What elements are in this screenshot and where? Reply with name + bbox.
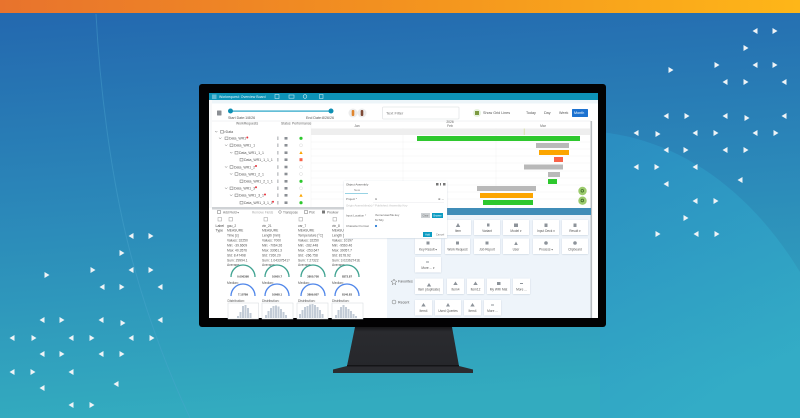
text filter: Text Filter	[386, 110, 404, 115]
column statistics: Length [V]	[332, 234, 347, 238]
average gauges: Average:	[332, 263, 345, 267]
average gauges: Average:	[227, 263, 240, 267]
card icons	[421, 223, 577, 306]
card labels: Clipboard	[568, 248, 582, 252]
average gauges: 0.000398	[237, 274, 249, 278]
section labels: Recent	[398, 301, 409, 305]
tree labels: Data_WR1	[229, 137, 246, 141]
column statistics: var_7	[298, 224, 306, 228]
column statistics: MEASURE	[298, 229, 315, 233]
column statistics	[227, 224, 361, 262]
column statistics: Min: -282.448	[298, 243, 318, 247]
profile toolbar: Preview	[327, 210, 339, 214]
dialog actions: Add	[425, 232, 430, 236]
column headers: Status	[281, 121, 291, 125]
average gauges: 8372.87	[342, 274, 352, 278]
column statistics: Min: -7064.26	[262, 243, 282, 247]
column statistics: Max: -253.647	[298, 248, 319, 252]
row labels: Type	[216, 229, 223, 233]
distribution histograms: Distribution:	[228, 299, 245, 303]
background light curve	[96, 14, 190, 418]
column statistics: MEASURE	[227, 229, 244, 233]
dialog actions	[423, 232, 445, 237]
tree scrollbar	[212, 207, 344, 210]
distribution histograms: Distribution:	[298, 299, 315, 303]
dialog form fields: M-Tidy	[375, 218, 384, 222]
dialog form fields: Published: Assembly Key	[375, 204, 408, 208]
row menu and status icons	[278, 136, 288, 204]
vertical scrollbar	[590, 121, 592, 318]
card labels: More ...	[487, 309, 498, 313]
card labels: User	[513, 248, 520, 252]
card labels: Item12	[471, 288, 481, 292]
card labels: More ... ▾	[421, 266, 435, 270]
dialog file buttons: Browse	[433, 214, 442, 217]
column statistics: Values: 32250	[227, 238, 248, 242]
average gauges: 10600.7	[272, 274, 282, 278]
column headers	[236, 121, 312, 125]
timeline headers: Mar	[540, 124, 547, 128]
work request tree	[209, 100, 344, 210]
tree labels: Data_WR1_1_1_1	[244, 158, 273, 162]
column statistics: Length [mm]	[262, 234, 280, 238]
card labels	[418, 229, 582, 313]
column statistics: Max: 39057.7	[332, 248, 352, 252]
average gauges	[227, 263, 359, 278]
timeline headers: 2026	[446, 120, 454, 124]
card labels: Input Deck ▾	[537, 229, 555, 233]
performance indicators	[299, 137, 303, 204]
monitor screen	[209, 93, 598, 319]
card labels: Key Result ▾	[419, 248, 437, 252]
red flags	[246, 136, 274, 203]
avatars	[348, 108, 366, 118]
column statistics: Values: 10197	[332, 238, 353, 242]
column statistics: Max: 33061.3	[262, 248, 282, 252]
median gauges	[227, 281, 359, 296]
card labels: Item4	[420, 309, 428, 313]
tree labels: Data_WR1_3_1_1	[244, 201, 273, 205]
row labels	[216, 224, 224, 233]
distribution histograms	[228, 299, 363, 319]
dialog form fields: iti	[375, 197, 377, 201]
average gauges: Average:	[262, 263, 275, 267]
tree icons	[215, 130, 243, 204]
tree labels: Data_WR1_2_1_1	[244, 180, 273, 184]
profile toolbar: Transpose	[283, 210, 298, 214]
monitor stand	[333, 327, 473, 373]
app header bar	[209, 93, 598, 100]
median gauges: Median:	[227, 281, 239, 285]
column statistics: MEASURE	[262, 229, 279, 233]
dialog form fields: Project *	[346, 197, 358, 201]
dialog file buttons	[421, 213, 443, 218]
column statistics: Std: 8178.92	[332, 253, 351, 257]
profile toolbar: Add Field ▾	[223, 210, 239, 214]
column statistics: Sum: 7.27322	[298, 258, 319, 262]
column checkboxes	[218, 218, 336, 221]
card labels: Used Queries	[438, 309, 458, 313]
column statistics: Temperature [°C]	[298, 234, 323, 238]
triangle pattern: right	[634, 28, 786, 237]
card labels: Item4	[469, 309, 477, 313]
median gauges: 10668.1	[272, 292, 282, 296]
show grid lines: Show Grid Lines	[483, 111, 510, 115]
column headers: WorkRequests	[236, 121, 258, 125]
timeline headers: Feb	[447, 124, 453, 128]
dialog form fields: Origin Assemblies(s) *	[346, 204, 375, 208]
dialog form fields: Character Format	[346, 224, 369, 228]
calendar icon	[217, 110, 222, 116]
monitor bezel	[199, 84, 606, 327]
launch cards	[415, 220, 588, 316]
column statistics: Max: 40.3576	[227, 248, 247, 252]
section band	[344, 208, 591, 215]
app header bar: Workrequest: Overview Board	[219, 95, 266, 99]
row labels: Label	[216, 224, 224, 228]
column statistics: Std: 7260.20	[262, 253, 281, 257]
card labels: Model ▾	[510, 229, 522, 233]
data profile panel	[216, 210, 363, 319]
section labels	[391, 279, 413, 305]
column statistics: Min: -9560.46	[332, 243, 352, 247]
timeline headers: Jan	[354, 124, 360, 128]
background arc shape	[600, 132, 800, 418]
tree labels: Data_WR1_3	[234, 187, 255, 191]
tree labels: Data_WR1_2	[234, 165, 255, 169]
column statistics: Time [s]	[227, 234, 239, 238]
dialog radio	[375, 225, 377, 227]
column statistics: vin_21	[262, 224, 272, 228]
dialog tab: New	[354, 188, 361, 192]
timeline headers	[354, 120, 547, 128]
column statistics: Values: 32250	[298, 238, 319, 242]
triangle pattern: left	[10, 233, 162, 408]
average gauges: 3800.708	[307, 274, 319, 278]
tree labels: Data_WR1_1	[234, 144, 255, 148]
tree labels: rData	[224, 130, 233, 134]
date range slider	[228, 108, 334, 120]
profile toolbar	[218, 210, 339, 214]
dialog title: Object Assembly	[346, 182, 369, 186]
column statistics: Sum: 1.04337541?	[262, 258, 290, 262]
tree labels: Data_WR1_3_1	[239, 194, 264, 198]
column statistics: Std: -266.758	[298, 253, 318, 257]
card labels: Result ▾	[569, 229, 581, 233]
zoom buttons	[578, 187, 587, 205]
time scale buttons: Week	[559, 111, 569, 115]
dialog window controls	[436, 183, 446, 186]
card labels: Work Request	[447, 248, 468, 252]
date range slider: End Date:8/26/26	[306, 116, 334, 120]
column statistics: MEASURE	[332, 229, 349, 233]
column statistics: vin_8	[332, 224, 340, 228]
card labels: Item (duplicate)	[418, 288, 440, 292]
tree labels: Data_WR1_1_1	[239, 151, 264, 155]
gantt chart	[209, 120, 592, 318]
section labels: Favorites	[398, 280, 413, 284]
average gauges: Average:	[298, 263, 311, 267]
column headers: Performance	[292, 121, 312, 125]
tree labels: Data_WR1_2_1	[239, 172, 264, 176]
column statistics: gau_2	[227, 224, 236, 228]
text filter	[382, 107, 459, 119]
column statistics: Sum: 29994.1	[227, 258, 248, 262]
card labels: Variant	[482, 229, 492, 233]
time scale buttons: Month	[574, 111, 584, 115]
profile toolbar: Plot	[309, 210, 315, 214]
time scale buttons	[526, 109, 588, 117]
column statistics: Std: 8.47498	[227, 253, 246, 257]
time scale buttons: Day	[544, 111, 551, 115]
column statistics: Sum: 3.02362741E	[332, 258, 361, 262]
column statistics: Values: 7000	[262, 238, 281, 242]
object assembly dialog	[344, 181, 447, 238]
median gauges: 3899.807	[307, 292, 319, 296]
median gauges: Median:	[332, 281, 344, 285]
gantt bars	[417, 136, 580, 205]
median gauges: 7.10789	[238, 292, 248, 296]
card labels: Item	[455, 229, 461, 233]
dialog file buttons: Clear	[423, 214, 429, 217]
toolbar	[209, 100, 598, 120]
card labels: More ...	[516, 288, 527, 292]
median gauges: Median:	[262, 281, 274, 285]
dialog form fields	[346, 197, 444, 228]
median gauges: 8140.83	[342, 292, 352, 296]
dialog form fields: Input Location *	[346, 214, 367, 218]
show grid lines	[473, 109, 510, 117]
distribution histograms: Distribution:	[262, 299, 279, 303]
distribution histograms: Distribution:	[332, 299, 349, 303]
profile toolbar: Remove Fields	[252, 210, 274, 214]
card labels: My WR/ Mat	[490, 288, 507, 292]
card labels: Job Report	[479, 248, 495, 252]
dialog form fields: /home/user/file.key	[375, 213, 400, 217]
dialog form fields: ⊕ ↔	[438, 197, 444, 201]
dialog actions: Cancel	[436, 232, 445, 236]
median gauges: Median:	[298, 281, 310, 285]
column statistics: Min: -39.6609	[227, 243, 247, 247]
card labels: Process ▾	[539, 248, 553, 252]
top orange bar	[0, 0, 800, 13]
launch panel	[344, 208, 591, 318]
tree labels	[224, 130, 273, 205]
date range slider: Start Date:1/8/26	[228, 116, 255, 120]
time scale buttons: Today	[526, 111, 536, 115]
card labels: Item4	[452, 288, 460, 292]
